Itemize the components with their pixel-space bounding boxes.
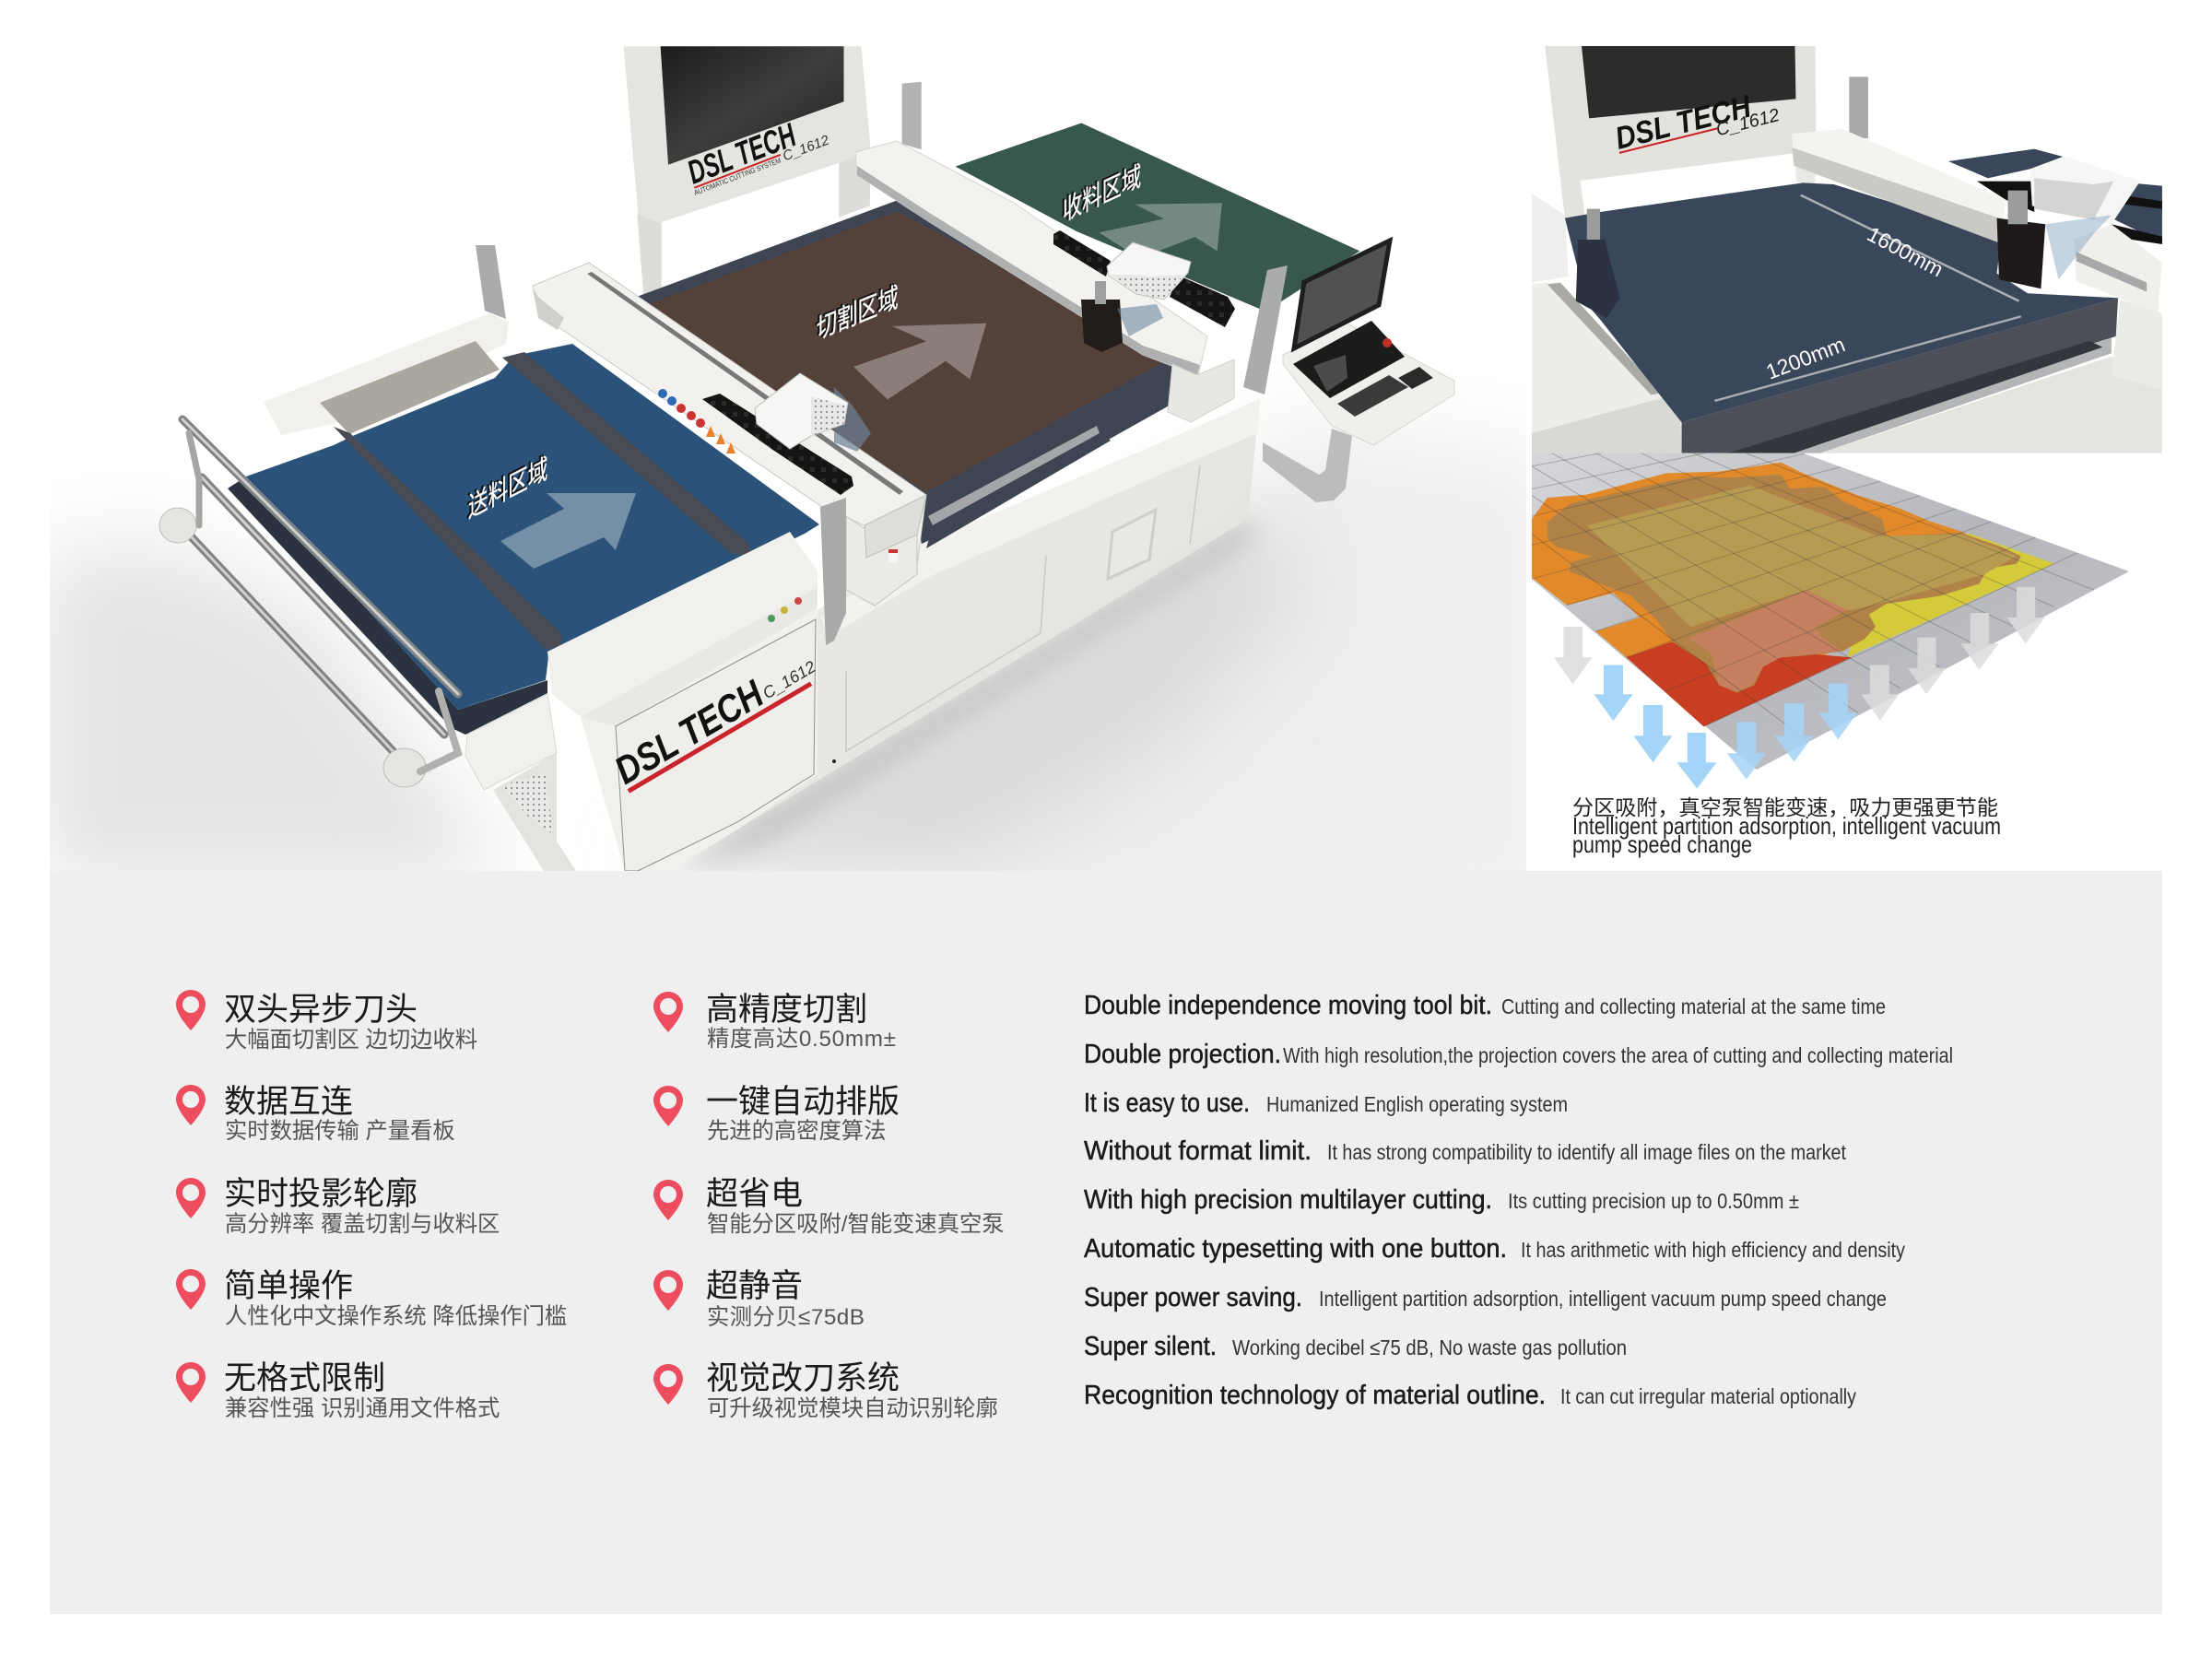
label: feeding zone: 送料区域 xyxy=(466,451,546,524)
feature 4: 人性化中文操作系统 降低操作门槛 xyxy=(225,1304,567,1329)
feature 8: 超省电 xyxy=(706,1176,803,1212)
panel: vacuum zones diagram xyxy=(1532,453,2129,857)
post right xyxy=(1243,265,1288,394)
list: English features: It has arithmetic with high efficiency and density xyxy=(1521,1238,1905,1262)
tool head rear xyxy=(1081,242,1191,352)
caption: pump speed change xyxy=(1572,830,1752,858)
chain front xyxy=(702,394,853,495)
list: English features: With high precision multilayer cutting. xyxy=(1084,1185,1492,1215)
arrow: cutting xyxy=(853,324,986,399)
orange tiles xyxy=(1532,463,1966,726)
feature 1 xyxy=(176,990,477,1053)
table underside xyxy=(228,477,547,735)
material rollers xyxy=(159,419,458,787)
feature 10: 视觉改刀系统 xyxy=(706,1360,900,1396)
feature 9: 实测分贝≤75dB xyxy=(707,1305,865,1330)
vent xyxy=(493,753,576,871)
feature 8 xyxy=(653,1176,1005,1237)
feature 4: 简单操作 xyxy=(224,1268,353,1304)
feature 7: 一键自动排版 xyxy=(706,1084,900,1120)
list: English features: Super silent. xyxy=(1084,1332,1217,1361)
list: English features: It is easy to use. xyxy=(1084,1088,1250,1118)
feature 6 xyxy=(653,992,896,1052)
table front edge xyxy=(1682,298,2118,453)
list: English features: It can cut irregular material optionally xyxy=(1560,1384,1856,1408)
floor shading xyxy=(50,424,1526,871)
list: English features: Double independence moving tool bit. xyxy=(1084,991,1492,1020)
feature 7 xyxy=(653,1084,900,1144)
panel: feature section xyxy=(50,871,2162,1614)
vacuum tile table xyxy=(1532,453,2129,770)
list: English features: With high resolution,the projection covers the area of cutting and collecting material xyxy=(1283,1043,1953,1067)
list: English features: Humanized English operating system xyxy=(1266,1092,1568,1116)
caption: 分区吸附，真空泵智能变速，吸力更强更节能 xyxy=(1572,795,1998,819)
label: collecting zone: 收料区域 xyxy=(1063,160,1141,228)
monitor xyxy=(1294,241,1390,348)
gantry xyxy=(1792,129,2162,390)
list: Chinese features right column xyxy=(653,992,1005,1421)
dimension lines xyxy=(1801,195,2018,301)
feature 5: 无格式限制 xyxy=(224,1360,385,1396)
caption xyxy=(1572,795,2001,858)
list: English features: Working decibel ≤75 dB, No waste gas pollution xyxy=(1232,1335,1627,1359)
brown cutting zone xyxy=(641,212,1173,492)
feature 9 xyxy=(653,1268,865,1330)
label: collecting zone: 收料区域 xyxy=(1061,159,1139,227)
feature 6: 高精度切割 xyxy=(706,992,867,1028)
logo on stand: C_1612 xyxy=(781,132,832,164)
logo on front cover: C_1612 xyxy=(759,657,818,702)
rear stand with screen xyxy=(624,46,871,302)
list: English features: Super power saving. xyxy=(1084,1283,1302,1312)
airflow arrows blue xyxy=(1594,665,1857,789)
logo small: C_1612 xyxy=(1714,105,1782,140)
pipe and control desk xyxy=(1263,241,1454,502)
feature 2 xyxy=(176,1084,455,1144)
machine body xyxy=(645,399,1260,871)
feature 5 xyxy=(176,1360,500,1421)
feature 2: 数据互连 xyxy=(224,1084,353,1120)
list: English features: Without format limit. xyxy=(1084,1136,1312,1166)
front leg xyxy=(846,516,917,606)
blue feeding zone xyxy=(246,344,819,710)
feature 3 xyxy=(176,1176,500,1237)
list: Chinese features left column xyxy=(176,990,567,1421)
logo on stand: DSL TECH xyxy=(682,115,801,191)
list: English features: Double projection. xyxy=(1084,1040,1281,1069)
label: feeding zone: 送料区域 xyxy=(468,452,547,524)
chain rear xyxy=(1053,230,1235,327)
post front xyxy=(820,498,846,645)
rear leg xyxy=(1168,359,1234,422)
list: English features: Automatic typesetting with one button. xyxy=(1084,1234,1507,1264)
post rear xyxy=(902,82,922,149)
feature 1: 大幅面切割区 边切边收料 xyxy=(225,1028,477,1053)
label: cutting zone: 切割区域 xyxy=(815,279,897,345)
feature 10 xyxy=(653,1360,998,1421)
feature 4 xyxy=(176,1268,567,1329)
feature 2: 实时数据传输 产量看板 xyxy=(225,1119,455,1144)
green collecting zone xyxy=(956,123,1359,312)
feature 1: 双头异步刀头 xyxy=(224,992,418,1028)
panel: main machine image xyxy=(37,46,1567,922)
list: English features: Cutting and collecting material at the same time xyxy=(1501,994,1886,1018)
feature 3: 实时投影轮廓 xyxy=(224,1176,418,1212)
table underframe xyxy=(630,200,1193,545)
list: English features xyxy=(1084,991,1953,1410)
label: cutting zone: 切割区域 xyxy=(817,280,899,346)
left ledge xyxy=(1532,283,1682,453)
red tiles xyxy=(1627,642,1852,726)
yellow tiles xyxy=(1847,533,2054,657)
list: English features: Recognition technology of material outline. xyxy=(1084,1381,1546,1410)
rear gantry xyxy=(855,141,1235,422)
logo small: DSL TECH xyxy=(1612,88,1756,157)
panel: cutting size photo xyxy=(1532,46,2162,455)
front gantry xyxy=(533,263,926,606)
material layer xyxy=(1547,475,2021,693)
rear stand xyxy=(1545,46,1868,218)
list: English features: It has strong compatibility to identify all image files on the market xyxy=(1327,1140,1847,1164)
feed unit cover xyxy=(264,245,509,435)
tile grid xyxy=(1532,453,2094,726)
feature 10: 可升级视觉模块自动识别轮廓 xyxy=(707,1396,998,1421)
tool head xyxy=(1997,157,2140,288)
feature 5: 兼容性强 识别通用文件格式 xyxy=(225,1396,500,1421)
safety icons xyxy=(658,389,667,398)
tool head front xyxy=(755,373,871,452)
label: 1600mm: 1600mm xyxy=(1864,221,1947,281)
logo on front cover: DSL TECH xyxy=(607,671,771,793)
feature 7: 先进的高密度算法 xyxy=(707,1119,886,1144)
feature 8: 智能分区吸附/智能变速真空泵 xyxy=(707,1212,1005,1237)
list: English features: Intelligent partition adsorption, intelligent vacuum pump speed change xyxy=(1319,1287,1887,1311)
front cover panel xyxy=(465,532,818,871)
caption: Intelligent partition adsorption, intelligent vacuum xyxy=(1572,812,2001,840)
side wing xyxy=(465,694,557,790)
airflow arrows grey xyxy=(1554,587,2045,721)
logo on stand: AUTOMATIC CUTTING SYSTEM xyxy=(693,156,782,197)
arrow: collecting xyxy=(1099,203,1222,258)
label: 1200mm: 1200mm xyxy=(1762,332,1848,384)
feature 3: 高分辨率 覆盖切割与收料区 xyxy=(225,1212,500,1237)
list: English features: Its cutting precision up to 0.50mm ± xyxy=(1508,1189,1799,1213)
feature 9: 超静音 xyxy=(706,1268,803,1304)
arrow: feeding xyxy=(500,493,636,569)
left tool head xyxy=(1532,194,1620,318)
feature 6: 精度高达0.50mm± xyxy=(707,1027,896,1052)
navy table xyxy=(1565,182,2118,422)
